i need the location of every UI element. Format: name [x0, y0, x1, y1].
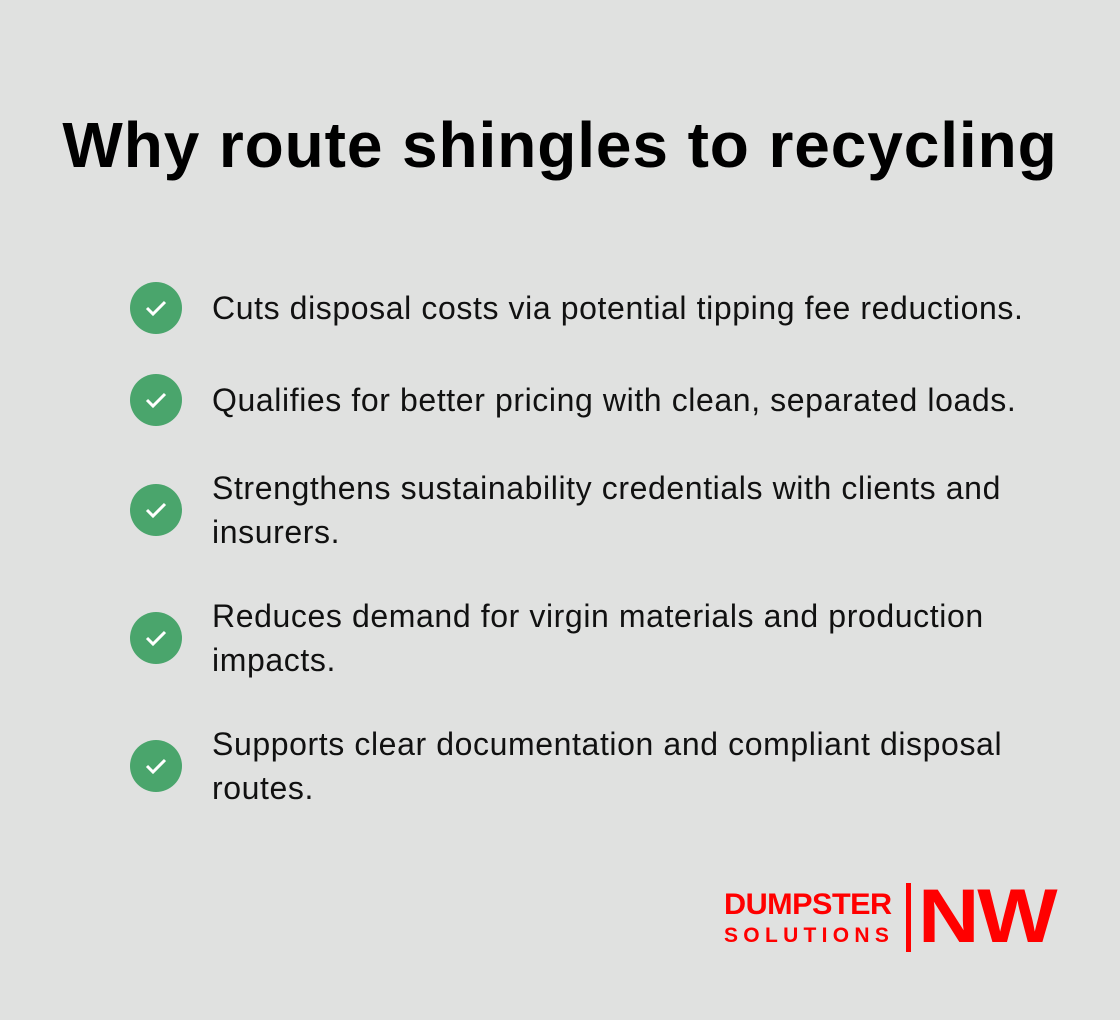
text 4: Reduces demand for virgin materials and production: [212, 598, 984, 634]
icon: check: [130, 374, 182, 426]
text 5: Supports clear documentation and compliant disposal: [212, 726, 1002, 762]
text 5: routes.: [212, 770, 314, 806]
item 3: [130, 470, 1001, 550]
text 4: impacts.: [212, 642, 336, 678]
item 4: [130, 598, 984, 678]
text 3: Strengthens sustainability credentials with clients and: [212, 470, 1001, 506]
icon: check: [130, 282, 182, 334]
item 1: [130, 282, 1024, 334]
item 2: [130, 374, 1016, 426]
text 4: [212, 598, 984, 678]
text 1: Cuts disposal costs via potential tipping fee reductions.: [212, 290, 1024, 326]
text 2: Qualifies for better pricing with clean, separated loads.: [212, 382, 1016, 418]
logo: NW: [918, 874, 1055, 959]
icon: check: [130, 484, 182, 536]
text 5: [212, 726, 1002, 806]
logo: [724, 874, 1058, 959]
logo: SOLUTIONS: [724, 924, 894, 947]
title: Why route shingles to recycling: [62, 109, 1058, 181]
text 3: [212, 470, 1001, 550]
item 5: [130, 726, 1002, 806]
icon: check: [130, 740, 182, 792]
icon: check: [130, 612, 182, 664]
text 3: insurers.: [212, 514, 340, 550]
logo: DUMPSTER: [724, 888, 892, 921]
